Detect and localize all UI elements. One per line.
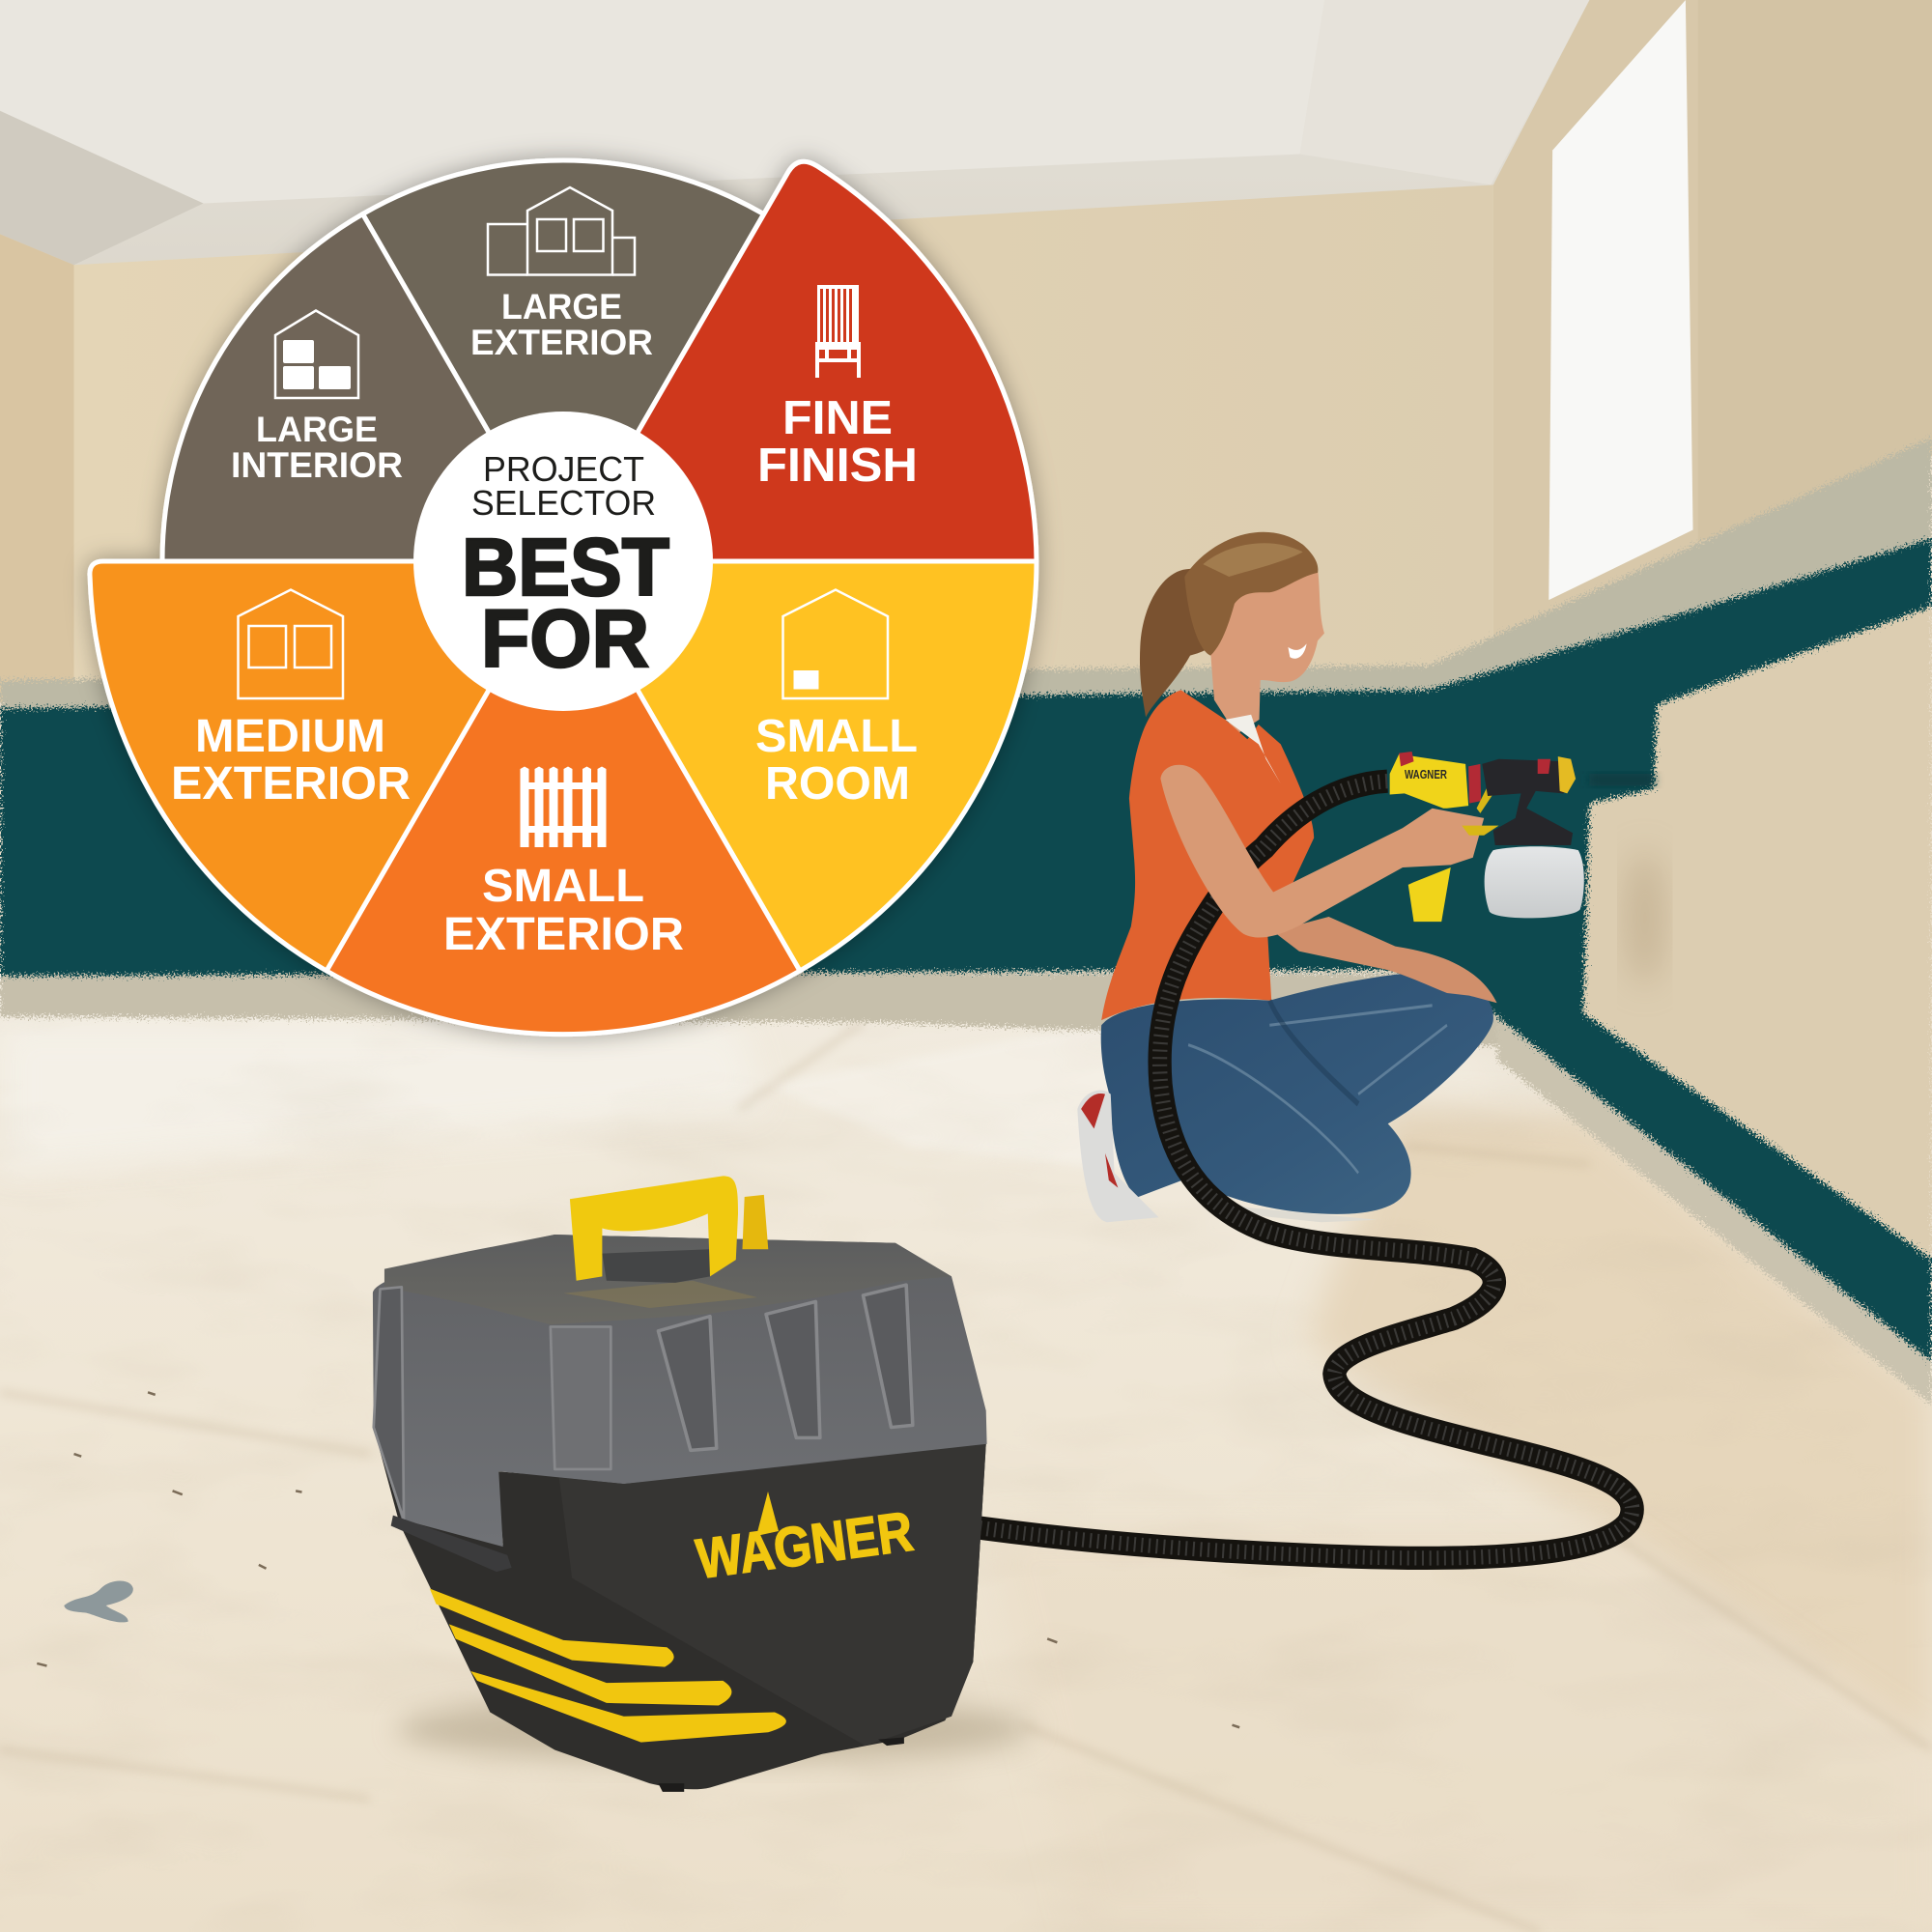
label: fine finish: FINE <box>782 392 893 444</box>
forearm <box>1160 765 1484 937</box>
spray gun handle <box>1408 867 1451 922</box>
speckled overspray on floor <box>0 971 1528 1047</box>
carry handle <box>570 1176 738 1281</box>
hub text: PROJECT <box>483 449 644 489</box>
arm and spray gun: WAGNER <box>1405 768 1447 782</box>
handle peg <box>742 1195 768 1249</box>
second forearm and hand <box>1273 917 1497 1003</box>
icon: large exterior houses <box>488 187 635 274</box>
feet <box>658 1737 904 1792</box>
label: large interior <box>231 410 403 485</box>
back wall <box>74 185 1493 702</box>
teal painted band <box>0 538 1932 1361</box>
left wall <box>0 234 74 702</box>
wedge: large exterior <box>363 160 763 561</box>
label: small room: SMALL <box>755 711 918 762</box>
centre hub <box>413 412 713 711</box>
hub text: SELECTOR <box>471 483 656 523</box>
masked sill band <box>0 438 1932 715</box>
label: large exterior: LARGE <box>501 287 622 327</box>
label: fine finish: FINISH <box>757 440 918 492</box>
jeans <box>1101 971 1493 1214</box>
ceiling <box>0 0 1602 283</box>
icon: small room house <box>782 589 888 698</box>
lid ribs <box>374 1285 913 1520</box>
window <box>1548 0 1932 600</box>
label: small exterior <box>443 861 684 960</box>
hair cap <box>1184 532 1318 656</box>
label: large interior: INTERIOR <box>231 445 403 485</box>
label: medium exterior <box>171 711 411 810</box>
hub text: BEST <box>462 522 669 612</box>
label: medium exterior: MEDIUM <box>195 711 385 762</box>
hub text <box>462 449 669 684</box>
hinge <box>391 1516 512 1572</box>
label: large exterior: EXTERIOR <box>470 323 653 362</box>
icon: chair <box>815 285 861 378</box>
hub text: FOR <box>481 593 649 684</box>
upper grey lid <box>373 1235 987 1547</box>
label: small exterior: EXTERIOR <box>443 909 684 960</box>
right wall <box>1430 0 1932 678</box>
lid top surface <box>384 1235 952 1324</box>
wedge: large interior <box>162 214 563 561</box>
lower black housing <box>374 1428 986 1789</box>
wheel wedges <box>90 160 1037 1035</box>
label: medium exterior: EXTERIOR <box>171 758 411 810</box>
shoe <box>1077 1091 1158 1222</box>
wedge: small exterior <box>327 561 800 1035</box>
label: large exterior <box>470 287 653 362</box>
paint cup <box>1485 846 1584 918</box>
WAGNER logo on turbine: WAGNER <box>693 1500 917 1591</box>
label: small room: ROOM <box>765 758 910 810</box>
yellow stripes <box>430 1589 786 1743</box>
label: fine finish <box>757 392 918 492</box>
icon: medium house with rooms <box>238 589 343 698</box>
floor drop cloth <box>0 974 1932 1932</box>
spray gun body <box>1390 754 1468 809</box>
wedge: medium exterior <box>90 561 563 971</box>
label: small room <box>755 711 918 810</box>
project selector wheel <box>90 160 1037 1035</box>
arm and spray gun <box>1160 752 1584 937</box>
wedge: fine finish <box>563 161 1037 561</box>
label: small exterior: SMALL <box>482 861 644 912</box>
air hose from spray gun to turbine <box>980 781 1633 1558</box>
body diagonal panel <box>559 1444 986 1746</box>
spray gun red ring and trigger <box>1399 752 1481 804</box>
smile <box>1288 643 1307 659</box>
lid top recess <box>602 1249 710 1283</box>
ponytail hair <box>1140 567 1269 717</box>
paint spot <box>64 1580 133 1622</box>
label: large interior: LARGE <box>256 410 378 449</box>
turbine shadow <box>396 1695 1034 1763</box>
nozzle <box>1482 759 1575 845</box>
face and neck <box>1210 567 1324 734</box>
woman with spray gun <box>1077 532 1497 1222</box>
icon: picket fence <box>520 767 607 847</box>
turbine unit <box>373 1176 987 1792</box>
shirt <box>1101 690 1314 1020</box>
trigger <box>1462 786 1499 836</box>
wedge: small room <box>563 561 1037 971</box>
unpainted wall patch <box>1583 607 1932 1260</box>
icon: large interior house with boxes <box>275 311 358 398</box>
logo peak <box>756 1492 779 1536</box>
